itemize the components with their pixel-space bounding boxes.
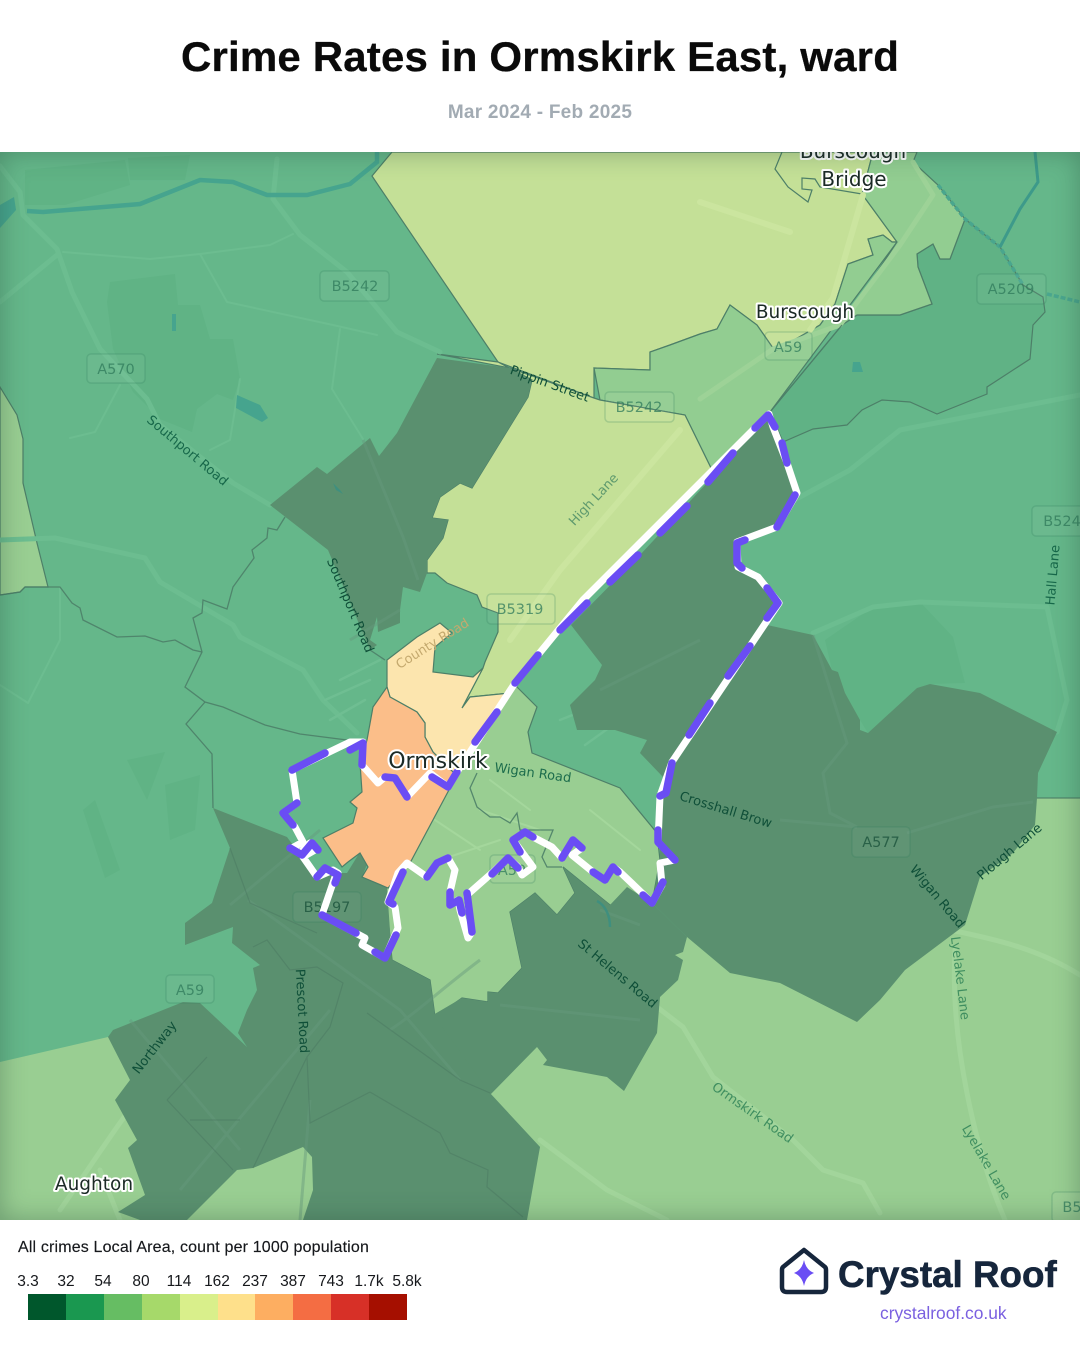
- legend tick labels: 162: [204, 1273, 230, 1290]
- legend tick labels: 387: [280, 1273, 306, 1290]
- road badge: B5242: [320, 271, 389, 301]
- road badge: centre: A59: [498, 863, 526, 879]
- legend tick labels: 80: [132, 1273, 150, 1290]
- road badge: B5242 second: [605, 392, 674, 422]
- area: dark south central: [433, 867, 687, 1095]
- road badge: A59 south: A59: [176, 983, 204, 999]
- road badge: B5242: B5242: [332, 279, 378, 295]
- road badge: A5209: [977, 274, 1046, 304]
- place label: Aughton: Aughton: [55, 1174, 133, 1195]
- road badge: A5209: A5209: [988, 282, 1034, 298]
- road badge: B5242 second: B5242: [616, 400, 662, 416]
- area: Burscough Bridge boundary loop: [775, 152, 862, 202]
- area: dark ward Ormskirk East north: [570, 415, 797, 777]
- road labels: Ormskirk Road: [709, 1080, 796, 1147]
- road labels: [130, 363, 1064, 1203]
- icon: house with crystal star: [780, 1248, 828, 1294]
- road badge: B524: B524: [1043, 514, 1080, 530]
- area: dark south-east: [652, 625, 1057, 1022]
- legend tick labels: 32: [57, 1273, 75, 1290]
- road labels: Southport Road: [143, 413, 231, 489]
- area: north yellow-green Burscough: [372, 152, 897, 398]
- road labels: Wigan Road: [906, 863, 967, 931]
- area: cream high-crime: [387, 623, 510, 775]
- road badge: A577: [852, 827, 910, 857]
- road badge: bottom right: [1052, 1192, 1080, 1222]
- legend tick labels: 1.7k: [354, 1273, 384, 1290]
- place label: Burscough Bridge: [800, 139, 906, 191]
- road badge: A570: A570: [97, 362, 135, 378]
- area: dark north-west ward: [270, 358, 532, 650]
- road labels: Crosshall Brow: [678, 789, 774, 832]
- place label: Burscough: Burscough: [756, 302, 854, 323]
- road badge: A570: [87, 354, 145, 383]
- choropleth map: [0, 152, 1080, 1220]
- map base: medium green areas: [0, 152, 1080, 1220]
- road labels: High Lane: [566, 471, 622, 529]
- road labels: Prescot Road: [292, 969, 311, 1054]
- area: west light edge: [0, 387, 48, 595]
- area: woodland patches: [25, 155, 965, 878]
- boundary lines between same-colour areas: [0, 325, 1080, 867]
- road labels: Pippin Street: [508, 363, 591, 406]
- place label: Burscough Bridge: Bridge: [821, 167, 887, 191]
- place label: Ormskirk: Ormskirk: [388, 749, 488, 774]
- legend tick labels: 114: [167, 1273, 191, 1290]
- road badge: B524: [1032, 506, 1080, 536]
- legend title: All crimes Local Area, count per 1000 population: [18, 1239, 369, 1256]
- road labels: Hall Lane: [1043, 544, 1064, 606]
- area: dark zone boundary lines: [167, 848, 523, 1217]
- road badge: B5197: [293, 892, 361, 922]
- road labels: Lyelake Lane: [958, 1123, 1013, 1203]
- area: southwest light green: [0, 1037, 330, 1220]
- subtitle: date range: Mar 2024 - Feb 2025: [448, 102, 632, 123]
- legend tick labels: 3.3: [17, 1273, 39, 1290]
- road badge: A577: A577: [862, 835, 900, 851]
- wordmark: Crystal Roof: [838, 1254, 1057, 1295]
- area: dark south-west: [108, 808, 540, 1220]
- title: Crime Rates in Ormskirk East, ward: [181, 33, 899, 80]
- area: High Lane yellow-green: [427, 354, 712, 708]
- road labels: St Helens Road: [574, 937, 660, 1012]
- road badge: centre: [490, 855, 535, 883]
- road labels: Plough Lane: [975, 821, 1045, 884]
- road badge: B5197: B5197: [304, 900, 350, 916]
- road labels: Southport Road: [323, 556, 376, 655]
- map edge shading: [0, 152, 1080, 1220]
- ward outline purple dashes: [283, 415, 795, 958]
- area: light green Burscough east: [842, 152, 965, 325]
- road badge: B5319: [487, 594, 555, 624]
- website url: crystalroof.co.uk: [880, 1303, 1007, 1323]
- legend tick labels: 54: [94, 1273, 112, 1290]
- road labels: County Road: [394, 616, 472, 673]
- road labels: Lyelake Lane: [947, 936, 972, 1021]
- area: orange highest-crime: [323, 687, 456, 888]
- area: north-east medium-dark band: [770, 219, 1045, 442]
- road badge: A59 south: [166, 975, 214, 1003]
- road labels: Wigan Road: [493, 761, 572, 786]
- legend tick labels: [17, 1273, 422, 1290]
- road badge: A59 north: A59: [774, 340, 802, 356]
- area: light green around A59 west: [594, 235, 897, 470]
- area: southeast light green: [490, 798, 1080, 1220]
- area: central south light green: [385, 683, 660, 1017]
- logo: Crystal Roof: [780, 1248, 1058, 1323]
- legend tick labels: 743: [318, 1273, 344, 1290]
- road labels: Northway: [130, 1018, 181, 1077]
- water: canal, river and ponds: [0, 152, 1080, 927]
- area: light road lines: [0, 159, 1080, 1220]
- road badge: A59 north: [765, 332, 812, 360]
- legend tick labels: 237: [242, 1273, 268, 1290]
- area: dark zone road texture: [130, 440, 1033, 1220]
- ward outline white: [283, 414, 797, 958]
- legend tick labels: 5.8k: [392, 1273, 422, 1290]
- road badge: B5319: B5319: [497, 602, 543, 618]
- ward boundary: Ormskirk East: [283, 414, 797, 958]
- legend colour scale: [28, 1294, 407, 1320]
